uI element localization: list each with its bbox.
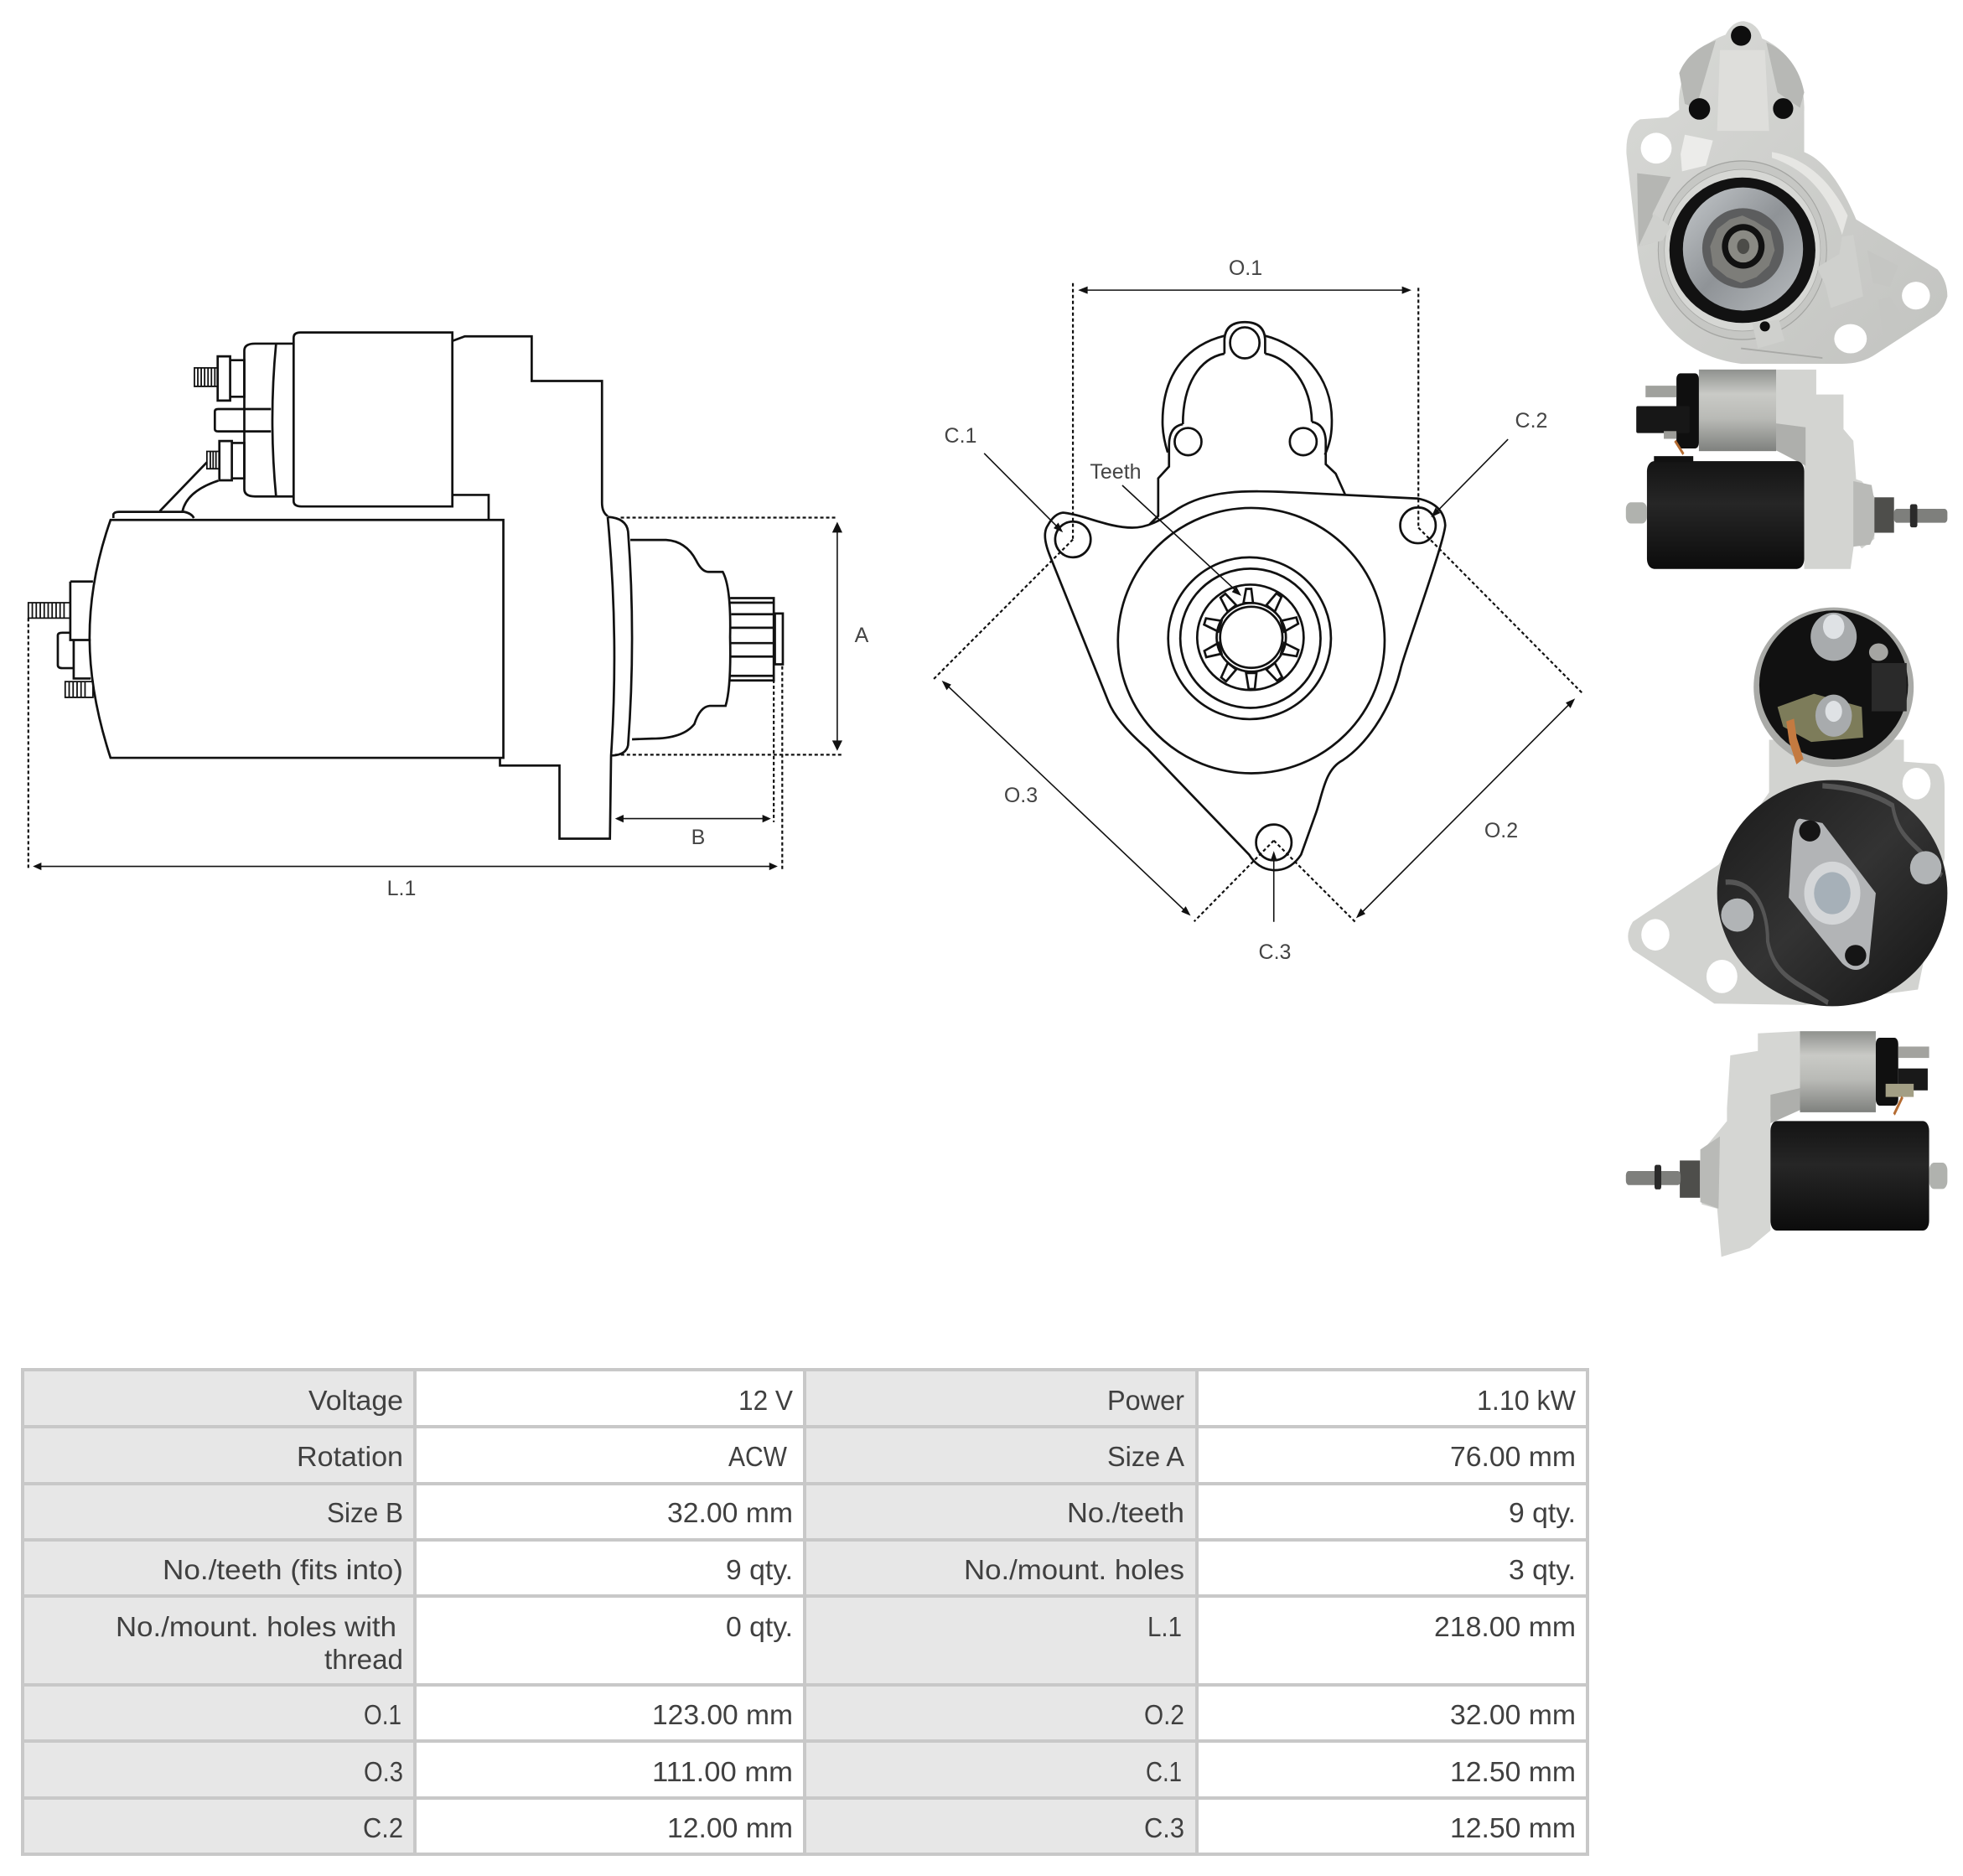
row: Size B and No./teeth: No./teeth — [1067, 1497, 1184, 1528]
label O.3: O.3 — [1004, 784, 1038, 807]
row: O.1 and O.2: 32.00 mm — [1450, 1699, 1576, 1730]
bolts — [1689, 26, 1793, 331]
motor body — [90, 520, 504, 758]
row: O.3 and C.1: 111.00 mm — [652, 1756, 793, 1787]
retaining tabs — [1639, 214, 1863, 349]
row: Voltage and Power — [308, 1385, 1577, 1416]
row: No./mount. holes with thread and L.1: L.1 — [1147, 1611, 1182, 1642]
row: No./mount. holes with thread and L.1: 0 qty. — [726, 1611, 793, 1642]
dimension O.2 arrow — [1274, 528, 1582, 922]
row: C.2 and C.3: C.3 — [1144, 1812, 1184, 1843]
row: O.1 and O.2: 123.00 mm — [652, 1699, 793, 1730]
dimension O.1 arrow — [1073, 283, 1418, 540]
side view line drawing — [28, 333, 842, 870]
row: Rotation and Size A: Rotation — [297, 1441, 403, 1472]
row: No./teeth (fits into) and No./mount. holes: No./mount. holes — [964, 1554, 1184, 1585]
leader C.3 — [1271, 851, 1277, 922]
row: O.1 and O.2: O.2 — [1144, 1699, 1184, 1730]
label L.1: L.1 — [387, 877, 416, 900]
row: No./mount. holes with thread and L.1 — [116, 1611, 1576, 1675]
mounting holes — [1641, 768, 1930, 993]
row: Voltage and Power: Voltage — [308, 1385, 403, 1416]
row: No./mount. holes with thread and L.1: thread — [324, 1644, 403, 1675]
label C.1: C.1 — [945, 424, 976, 448]
row: Voltage and Power: 1.10 kW — [1477, 1385, 1577, 1416]
photo: starter right side view — [1626, 1031, 1947, 1257]
label Teeth: Teeth — [1090, 460, 1142, 484]
row: O.3 and C.1: C.1 — [1146, 1756, 1182, 1787]
dimension A arrow — [615, 518, 842, 754]
rear terminals — [28, 582, 93, 697]
cable and bracket — [113, 462, 489, 520]
row: Voltage and Power: Power — [1107, 1385, 1184, 1416]
row: No./teeth (fits into) and No./mount. holes: 9 qty. — [726, 1554, 793, 1585]
row: O.3 and C.1: 12.50 mm — [1450, 1756, 1576, 1787]
row: C.2 and C.3 — [363, 1812, 1576, 1843]
leader C.2 — [1431, 439, 1508, 517]
row: C.2 and C.3: 12.50 mm — [1450, 1812, 1576, 1843]
row: Rotation and Size A: ACW — [728, 1441, 788, 1472]
photo: starter front view — [1626, 21, 1947, 364]
row: Rotation and Size A: Size A — [1107, 1441, 1184, 1472]
photo: starter rear view — [1628, 608, 1947, 1006]
row: Size B and No./teeth: 32.00 mm — [667, 1497, 793, 1528]
drive housing — [453, 336, 632, 838]
mounting holes — [1641, 132, 1930, 354]
leader C.1 — [984, 453, 1063, 532]
row: Rotation and Size A — [297, 1441, 1576, 1472]
specification table — [21, 1370, 1587, 1854]
leader Teeth — [1122, 485, 1241, 596]
solenoid — [194, 333, 453, 506]
row: No./teeth (fits into) and No./mount. holes: No./teeth (fits into) — [163, 1554, 403, 1585]
row: O.3 and C.1 — [364, 1756, 1576, 1787]
concentric discs — [1118, 508, 1385, 773]
pinion — [730, 598, 783, 681]
row: Rotation and Size A: 76.00 mm — [1450, 1441, 1576, 1472]
front view line drawing — [933, 283, 1582, 922]
row: C.2 and C.3: C.2 — [363, 1812, 403, 1843]
row: No./teeth (fits into) and No./mount. holes: 3 qty. — [1509, 1554, 1576, 1585]
row: Size B and No./teeth: 9 qty. — [1509, 1497, 1576, 1528]
row: C.2 and C.3: 12.00 mm — [667, 1812, 793, 1843]
pinion teeth — [1204, 588, 1299, 689]
label C.2: C.2 — [1515, 409, 1547, 433]
dimension O.3 arrow — [933, 540, 1274, 921]
fixing bolts — [1721, 821, 1941, 966]
mounting flange — [1045, 491, 1445, 870]
row: Voltage and Power: 12 V — [738, 1385, 793, 1416]
label O.2: O.2 — [1484, 819, 1518, 842]
dimension B arrow — [615, 680, 774, 822]
dimension L.1 arrow — [28, 618, 782, 870]
label C.3: C.3 — [1259, 941, 1291, 964]
row: Size B and No./teeth — [327, 1497, 1576, 1528]
row: No./teeth (fits into) and No./mount. holes — [163, 1554, 1576, 1585]
row: Size B and No./teeth: Size B — [327, 1497, 403, 1528]
row: O.3 and C.1: O.3 — [364, 1756, 403, 1787]
solenoid terminals — [1810, 613, 1888, 737]
row: No./mount. holes with thread and L.1: No./mount. holes with — [116, 1611, 396, 1642]
photo: starter left side view — [1626, 370, 1947, 569]
label B: B — [691, 826, 705, 849]
row: O.1 and O.2 — [364, 1699, 1576, 1730]
label O.1: O.1 — [1229, 257, 1262, 280]
mounting holes — [1055, 507, 1436, 860]
row: No./mount. holes with thread and L.1: 218.00 mm — [1434, 1611, 1576, 1642]
table background columns — [21, 1370, 1587, 1854]
label A: A — [855, 624, 869, 647]
drive nose — [630, 540, 730, 739]
solenoid mounting outline — [1149, 322, 1345, 525]
row: O.1 and O.2: O.1 — [364, 1699, 401, 1730]
